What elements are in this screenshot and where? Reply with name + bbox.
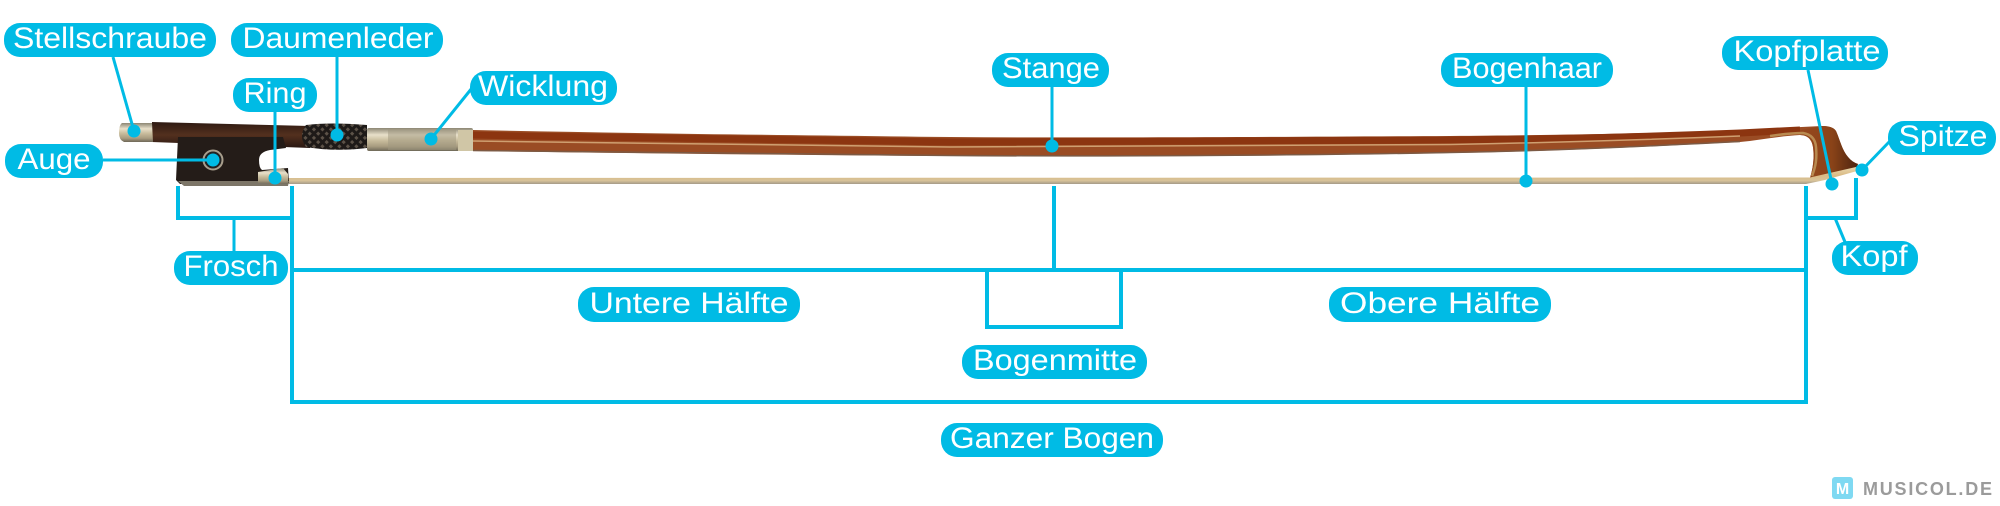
label: Kopfplatte: Kopfplatte	[1734, 35, 1880, 68]
label: Kopf: Kopf	[1840, 240, 1908, 273]
label: Spitze: Spitze	[1898, 120, 1988, 153]
label: Auge: Auge	[18, 143, 90, 176]
label: Wicklung: Wicklung	[478, 70, 608, 103]
metal ferrule and winding	[367, 128, 473, 151]
label: Stange	[992, 52, 1109, 152]
label: Bogenmitte: Bogenmitte	[973, 344, 1137, 377]
dark stick at the frog end	[152, 122, 310, 148]
label: Wicklung	[424, 70, 617, 146]
label: Bogenhaar: Bogenhaar	[1452, 52, 1602, 85]
label: Bogenhaar	[1441, 52, 1613, 188]
watermark: MUSICOL.DE: MUSICOL.DE	[1863, 479, 1992, 499]
label: Daumenleder: Daumenleder	[242, 22, 434, 55]
label: Ring: Ring	[244, 77, 306, 110]
bracket: halves	[292, 268, 1806, 272]
label: Obere Hälfte: Obere Hälfte	[1340, 287, 1540, 320]
label: Kopfplatte	[1722, 35, 1888, 190]
bracket: Bogenmitte box	[987, 270, 1121, 327]
bracket: centre line	[1052, 186, 1056, 270]
bow stick and head	[473, 126, 1858, 178]
label: Stellschraube	[4, 22, 216, 138]
bracket: Kopf	[1806, 178, 1918, 275]
label: Ganzer Bogen: Ganzer Bogen	[950, 422, 1154, 455]
label: Stellschraube: Stellschraube	[13, 22, 207, 55]
bow hair	[285, 167, 1857, 184]
label: Daumenleder	[231, 22, 443, 142]
icon: logo M: M	[1836, 481, 1849, 498]
violin bow	[119, 122, 1858, 186]
thumb leather grip	[302, 124, 367, 150]
label: Ring	[233, 77, 317, 184]
label: Frosch: Frosch	[184, 250, 278, 283]
icon: logo M	[1832, 477, 1853, 499]
frog underslide	[178, 181, 289, 186]
bracket: Ganzer Bogen	[292, 186, 1806, 402]
label: Untere Hälfte: Untere Hälfte	[590, 287, 788, 320]
frog	[176, 137, 289, 184]
adjusting screw	[119, 123, 153, 142]
frog eye	[204, 150, 222, 170]
label: Spitze	[1856, 120, 1996, 176]
label: Auge	[5, 143, 220, 178]
label: Stange: Stange	[1002, 52, 1100, 85]
frog ring	[258, 168, 288, 184]
bracket: Frosch	[174, 186, 292, 285]
